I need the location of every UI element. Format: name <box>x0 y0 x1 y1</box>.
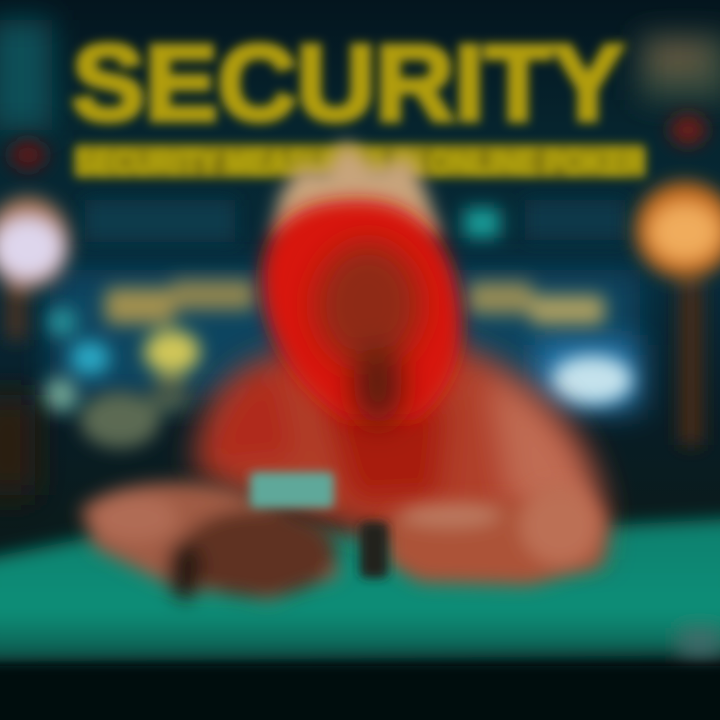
top corner panels <box>0 20 720 130</box>
screen band <box>43 270 640 448</box>
right lamp <box>635 182 720 445</box>
left lamp <box>0 197 70 495</box>
red indicator lights <box>10 115 706 170</box>
crown <box>272 140 442 238</box>
title: SECURITY <box>72 22 624 143</box>
hood <box>262 200 462 420</box>
background info panels <box>85 200 625 242</box>
left arm <box>80 482 340 600</box>
torso <box>195 345 605 560</box>
person <box>80 140 606 600</box>
face <box>316 243 420 425</box>
phone <box>250 472 334 508</box>
right arm <box>388 485 606 585</box>
wristband <box>360 522 388 578</box>
table <box>0 518 720 662</box>
table front edge <box>0 666 720 720</box>
